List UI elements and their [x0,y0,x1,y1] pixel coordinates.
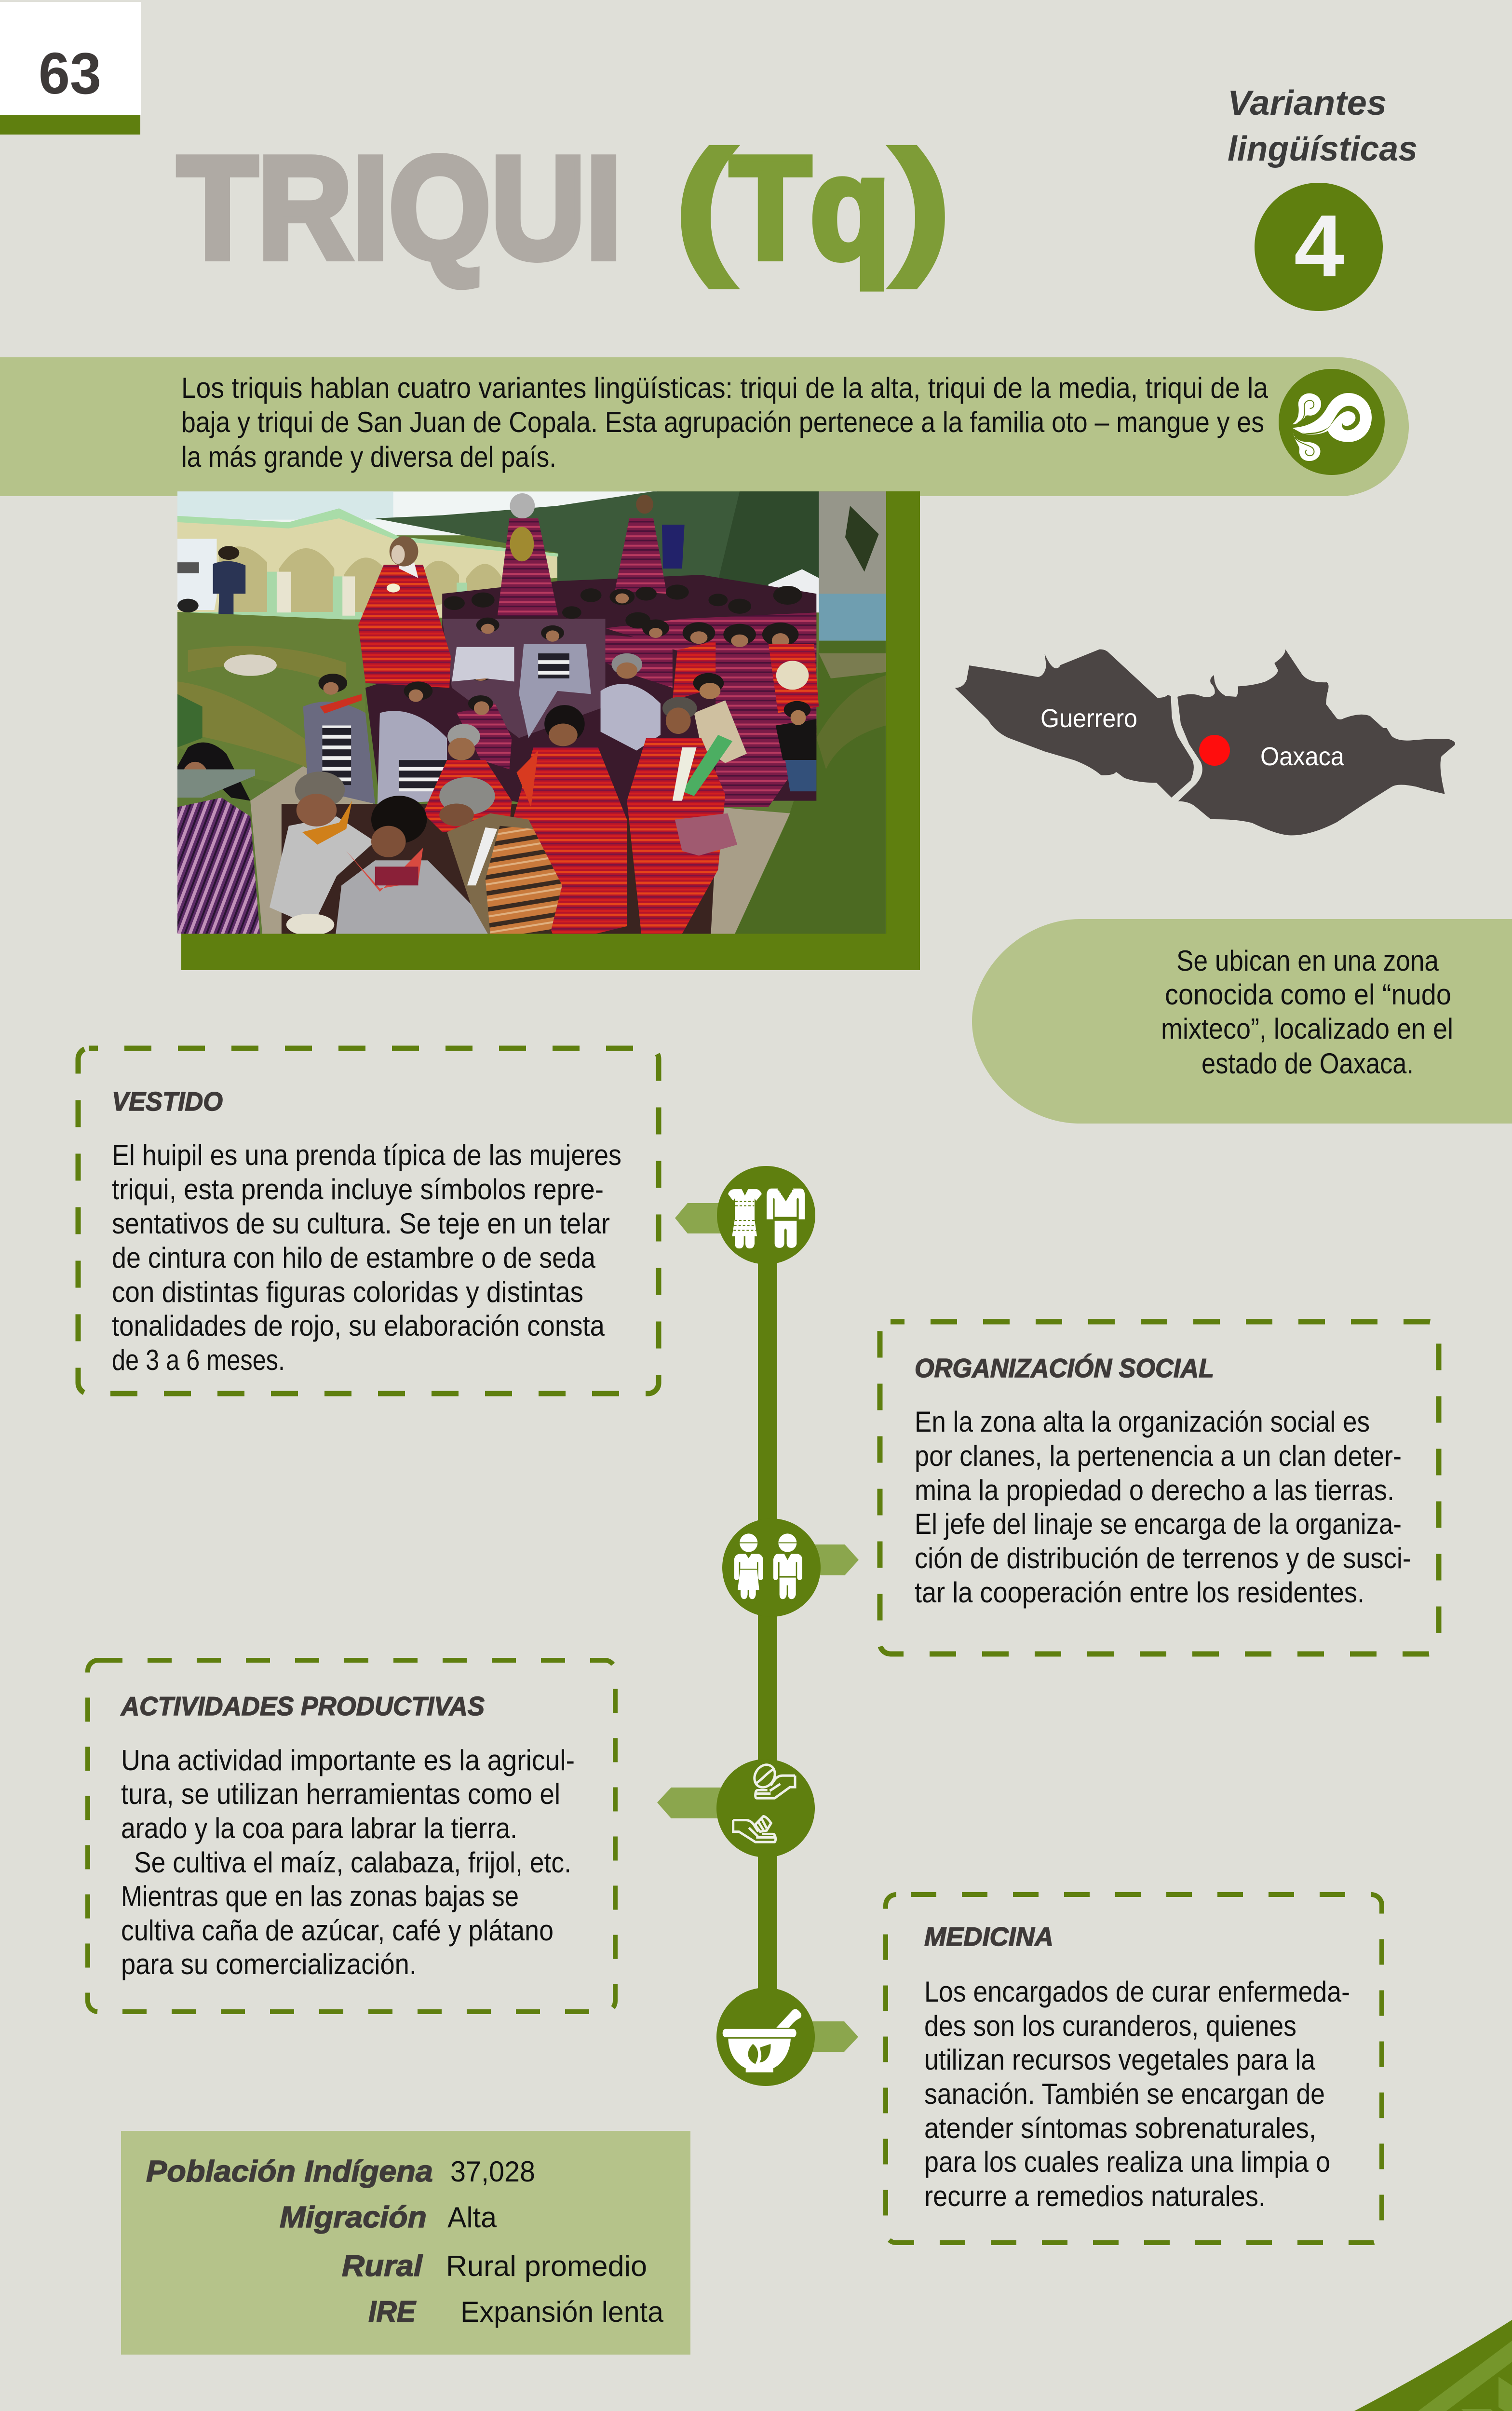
woman with striped robe left [177,798,260,934]
body: medicina: recurre a remedios naturales. [924,2180,1266,2212]
body: vestido: triqui, esta prenda incluye símbolos repre- [112,1173,604,1206]
body: actividades productivas: para su comercialización. [121,1948,417,1980]
stat: migración: Migración [280,2201,427,2234]
heading: vestido: VESTIDO [112,1086,223,1116]
map label: Guerrero: Guerrero [1040,704,1137,733]
page number tab: 63 [39,41,101,106]
intro text: la más grande y diversa del país. [181,441,556,473]
panel: organización social [880,1322,1439,1654]
stats panel [121,2131,690,2355]
mid crowd garments [673,641,716,700]
body: medicina: utilizan recursos vegetales para la [924,2044,1316,2076]
arrow: actividades productivas [657,1788,728,1818]
timeline stem [758,1215,777,2037]
map region: Guerrero [955,650,1194,798]
bottom textile pattern [1354,2320,1512,2411]
panel: actividades productivas [88,1660,615,2012]
location text [1161,945,1453,1080]
building [177,509,557,619]
figures in front [303,702,375,804]
variants count badge: 4 [1294,196,1344,295]
hat [776,661,809,690]
photo backing panel [181,491,920,970]
tower and chapel [819,491,886,595]
woman in red right [627,738,725,934]
stat: IRE: Expansión lenta [460,2296,664,2328]
location text: Se ubican en una zona [1176,945,1439,977]
stat: rural: Rural [342,2249,423,2283]
body: vestido: El huipil es una prenda típica de las mujeres [112,1139,621,1171]
stat: rural: Rural promedio [446,2250,647,2282]
panel: medicina [886,1895,1382,2243]
body: medicina: atender síntomas sobrenaturales, [924,2112,1316,2144]
page number tab [0,2,141,135]
map location marker [1199,735,1230,766]
woman in red centre [509,747,627,934]
body: medicina: para los cuales realiza una limpia o [924,2146,1330,2178]
stat: IRE [368,2295,664,2329]
van [177,539,217,610]
location text: mixteco”, localizado en el [1161,1013,1453,1045]
body: actividades productivas: Una actividad importante es la agricul- [121,1744,575,1776]
body: actividades productivas: Mientras que en las zonas bajas se [121,1880,519,1912]
stat: población indígena: 37,028 [450,2155,535,2188]
icon: people [722,1518,821,1617]
variants count badge [1255,183,1383,311]
body: vestido: con distintas figuras coloridas y distintas [112,1276,583,1308]
location text: estado de Oaxaca. [1202,1047,1414,1080]
body: organización social: por clanes, la pertenencia a un clan deter- [915,1440,1402,1472]
body: medicina: sanación. También se encargan de [924,2078,1325,2110]
arrow: medicina [805,2021,858,2052]
title: ) [890,121,952,289]
location callout [972,919,1512,1124]
timeline [657,1166,859,2086]
crowd heads [318,584,802,700]
old woman grey shawl [270,816,375,926]
old man brown shawl [447,813,562,934]
body: medicina: Los encargados de curar enfermeda- [924,1976,1350,2008]
body: vestido [112,1139,621,1376]
body: actividades productivas [121,1744,575,1980]
body: medicina: des son los curanderos, quienes [924,2010,1296,2042]
map region: Oaxaca [1177,650,1455,835]
panel: vestido [78,1048,659,1394]
intro text: baja y triqui de San Juan de Copala. Esta agrupación pertenece a la familia oto – mangue y es [181,406,1264,438]
body: organización social: tar la cooperación entre los residentes. [915,1576,1364,1609]
body: organización social: En la zona alta la organización social es [915,1406,1370,1438]
hill [375,491,819,591]
dark crowd base [282,804,718,934]
arrow: vestido [675,1203,728,1233]
stat: IRE: IRE [368,2295,417,2329]
title: q [810,126,890,290]
arrow: organización social [810,1544,859,1575]
heading: medicina: MEDICINA [924,1922,1053,1951]
right grass bank [735,641,886,934]
statues [358,565,451,688]
stat: migración: Alta [447,2201,497,2234]
sky [177,491,657,535]
variantes lingüísticas label [1228,84,1418,168]
icon: language swirl [1279,369,1385,475]
body: vestido: sentativos de su cultura. Se teje en un telar [112,1207,610,1240]
stat: rural [342,2249,647,2283]
body: vestido: tonalidades de rojo, su elaboración consta [112,1310,605,1342]
intro text: Los triquis hablan cuatro variantes lingüísticas: triqui de la alta, triqui de la media, triqui de la [181,372,1269,404]
body: actividades productivas: cultiva caña de azúcar, café y plátano [121,1914,554,1947]
map of Guerrero and Oaxaca [955,650,1455,835]
heading: organización social: ORGANIZACIÓN SOCIAL [915,1353,1214,1383]
photo: Triqui procession [177,491,920,970]
body: vestido: de 3 a 6 meses. [112,1344,285,1376]
body: actividades productivas: Se cultiva el maíz, calabaza, frijol, etc. [134,1846,571,1879]
intro band [0,357,1409,496]
mid crowd faces [323,594,789,702]
green folder [682,735,732,796]
body: organización social [915,1406,1411,1609]
icon: clothing [717,1166,815,1264]
body: organización social: mina la propiedad o derecho a las tierras. [915,1474,1394,1506]
title: ( [674,121,738,289]
icon: mortar and pestle [716,1988,815,2086]
map label: Oaxaca: Oaxaca [1260,742,1345,771]
heading: actividades productivas: ACTIVIDADES PRODUCTIVAS [120,1691,485,1721]
woman grey shawl front [336,860,488,934]
icon: hands with crops [716,1759,815,1857]
title: TRIQUI [177,126,622,289]
grass [177,612,345,637]
woman in red back-left [423,760,512,832]
intro text [181,372,1269,473]
body: organización social: ción de distribución de terrenos y de susci- [915,1542,1411,1574]
location text: conocida como el “nudo [1165,978,1451,1011]
stat: migración [280,2201,497,2234]
body: actividades productivas: tura, se utilizan herramientas como el [121,1778,560,1810]
stone path [250,766,375,934]
crowd mass [365,575,816,832]
variantes lingüísticas label: lingüísticas [1228,130,1418,168]
body: organización social: El jefe del linaje se encarga de la organiza- [915,1508,1402,1540]
title [177,121,952,290]
body: vestido: de cintura con hilo de estambre o de seda [112,1242,596,1274]
stat: población indígena: Población Indígena [146,2155,433,2188]
variantes lingüísticas label: Variantes [1228,84,1387,122]
boy in background [213,561,246,614]
body: medicina [924,1976,1350,2212]
title: T [730,126,811,289]
body: actividades productivas: arado y la coa para labrar la tierra. [121,1812,517,1844]
woven bag [675,813,737,855]
